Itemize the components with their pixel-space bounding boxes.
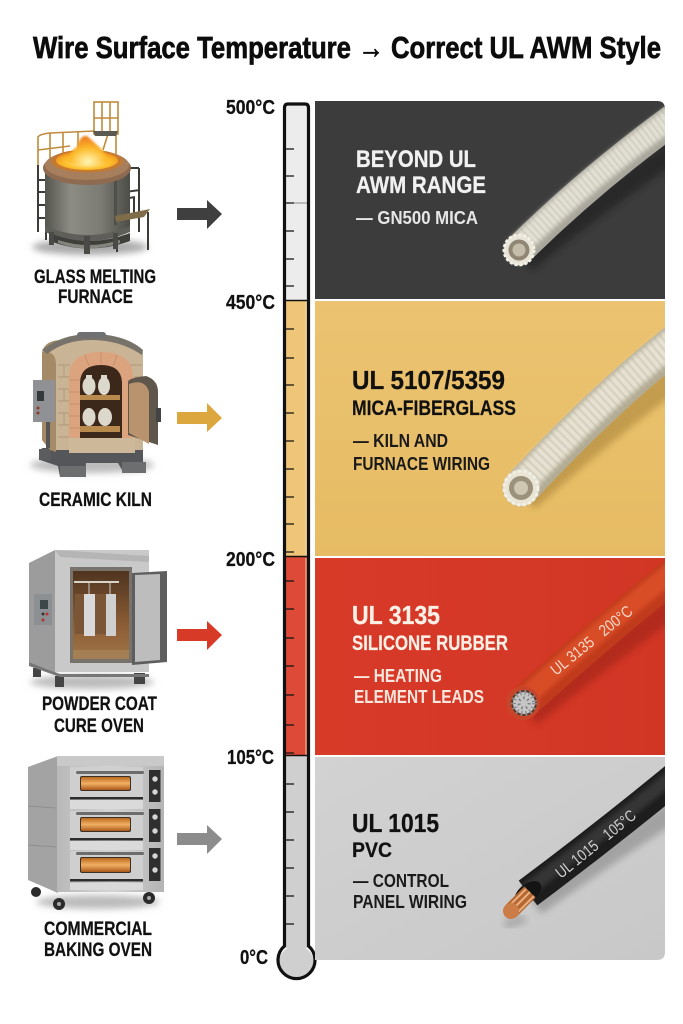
panel: ceramic kiln source xyxy=(30,332,161,511)
icon: glass melting furnace xyxy=(32,102,150,255)
subheading: PVC: PVC xyxy=(352,839,392,862)
heading: beyond UL AWM range xyxy=(356,150,486,194)
text: heating element leads: ELEMENT LEADS xyxy=(354,687,484,707)
text: GN500 mica: — GN500 MICA xyxy=(356,208,478,228)
label: glass melting furnace: FURNACE xyxy=(58,287,133,308)
icon: powder coat cure oven xyxy=(29,550,167,689)
label: commercial baking oven xyxy=(44,919,152,961)
label: commercial baking oven: BAKING OVEN xyxy=(44,940,152,961)
heading: UL 5107/5359: UL 5107/5359 xyxy=(352,365,505,395)
thermometer xyxy=(278,104,315,980)
subheading: silicone rubber: SILICONE RUBBER xyxy=(352,632,508,655)
wire: black PVC cable with copper strands xyxy=(503,774,675,925)
text: kiln and furnace wiring: FURNACE WIRING xyxy=(353,454,490,474)
panel: UL 3135 silicone rubber xyxy=(315,558,675,755)
arrow: furnace to beyond UL xyxy=(177,200,222,229)
label: glass melting furnace: GLASS MELTING xyxy=(34,267,156,288)
heading: beyond UL AWM range: BEYOND UL xyxy=(356,146,476,173)
text: control panel wiring xyxy=(353,874,466,908)
temperature scale labels xyxy=(226,97,275,969)
heading: UL 3135: UL 3135 xyxy=(352,600,440,630)
wire: black PVC cable with copper strands: UL 1015 105°C xyxy=(553,807,640,882)
arrow: kiln to UL 5107/5359 xyxy=(177,403,222,432)
text: control panel wiring: — CONTROL xyxy=(353,871,449,891)
text: control panel wiring: PANEL WIRING xyxy=(353,892,467,912)
subheading: mica-fiberglass: MICA-FIBERGLASS xyxy=(352,397,516,420)
temperature scale labels: 200°C xyxy=(226,549,275,571)
panel: glass melting furnace source xyxy=(32,102,156,308)
wire: white braided mica xyxy=(504,115,675,266)
text: kiln and furnace wiring xyxy=(353,434,490,470)
panel: commercial baking oven source xyxy=(28,756,164,961)
arrow: cure oven to UL 3135 xyxy=(177,621,222,650)
panel: UL 5107/5359 mica-fiberglass xyxy=(315,301,675,556)
text: heating element leads xyxy=(354,669,484,703)
temperature scale labels: 450°C xyxy=(226,292,275,314)
icon: commercial baking oven xyxy=(28,756,164,910)
icon: ceramic kiln xyxy=(30,332,161,477)
panel: beyond UL AWM range xyxy=(315,101,675,299)
panel: UL 1015 PVC xyxy=(315,757,675,960)
label: powder coat cure oven: POWDER COAT xyxy=(42,694,157,715)
arrow: baking oven to UL 1015 xyxy=(177,825,222,854)
label: glass melting furnace xyxy=(34,267,156,308)
wire: red silicone cable xyxy=(506,569,675,720)
label: commercial baking oven: COMMERCIAL xyxy=(44,919,152,940)
text: heating element leads: — HEATING xyxy=(354,666,442,686)
text: kiln and furnace wiring: — KILN AND xyxy=(353,431,448,451)
label: powder coat cure oven: CURE OVEN xyxy=(54,716,144,737)
label: ceramic kiln: CERAMIC KILN xyxy=(39,490,152,511)
label: powder coat cure oven xyxy=(42,694,157,737)
heading: beyond UL AWM range: AWM RANGE xyxy=(356,172,486,199)
temperature scale labels: 500°C xyxy=(226,97,275,119)
wire: red silicone cable: UL 3135 200°C xyxy=(548,603,636,679)
temperature scale labels: 0°C xyxy=(240,947,268,969)
wire: cream braided mica-fiberglass xyxy=(503,340,675,506)
panel: powder coat cure oven source xyxy=(29,550,167,737)
temperature scale labels: 105°C xyxy=(227,747,274,769)
heading: UL 1015: UL 1015 xyxy=(352,808,439,838)
